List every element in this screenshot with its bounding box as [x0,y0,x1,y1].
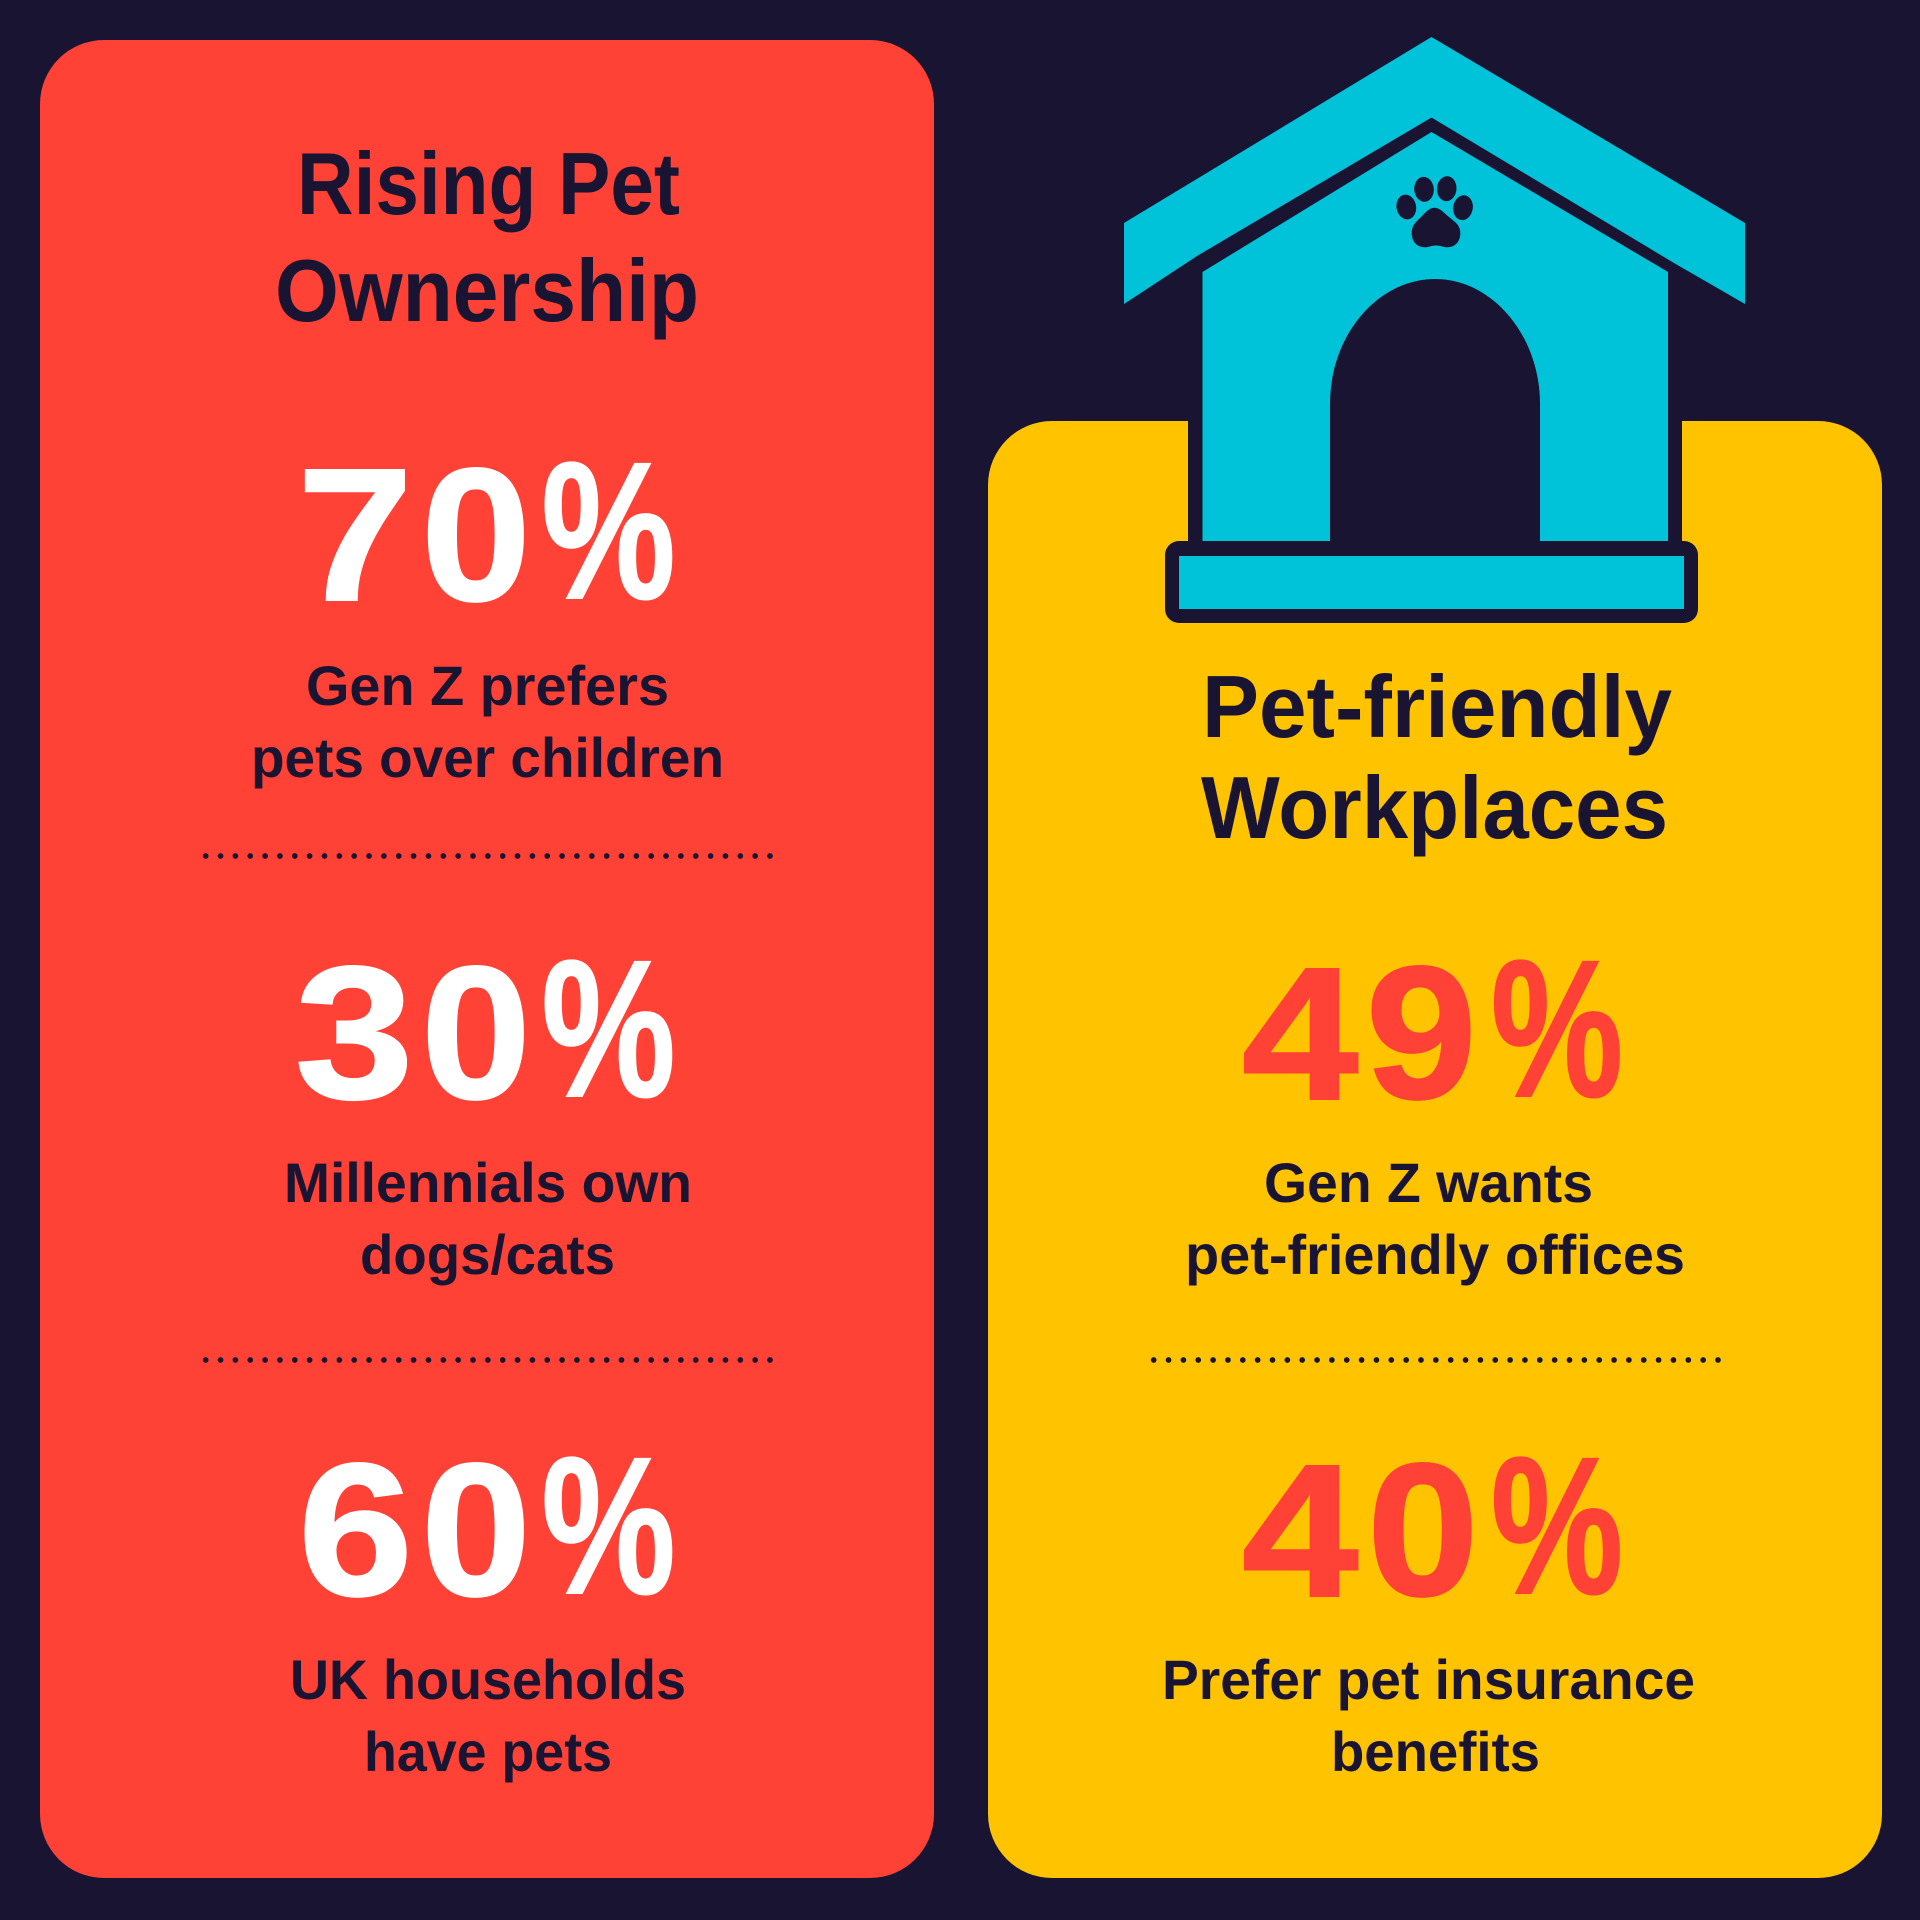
house body [1202,132,1668,541]
stat: 40% [1242,1417,1623,1637]
text: millennials own dogs/cats [284,1151,692,1286]
text: prefer pet insurance: Prefer pet insurance [1162,1648,1695,1711]
text: gen z prefers pets: Gen Z prefers [306,654,669,717]
text: prefer pet insurance: benefits [1331,1720,1540,1783]
house base [1179,556,1684,609]
text: prefer pet insurance [1162,1648,1695,1783]
heading: rising pet ownership: Rising Pet [297,134,680,233]
heading: pet-friendly workplaces: Workplaces [1201,758,1668,857]
stat: 40%: 4 [1242,1426,1358,1637]
stat: 49%: % [1491,920,1623,1138]
panel: pet-friendly workplaces [988,421,1882,1878]
stat: 60%: % [542,1417,676,1635]
text: uk households have pets: UK households [290,1648,686,1711]
text: uk households have pets [290,1648,686,1783]
stat: 49%: 9 [1366,928,1477,1139]
stat: 40%: 0 [1367,1425,1479,1636]
stat: 30%: 0 [421,928,531,1139]
stat: 49%: 4 [1242,929,1358,1140]
text: gen z prefers pets [251,654,724,789]
stat: 60% [298,1417,676,1636]
text: millennials own dogs/cats: Millennials own [284,1151,692,1214]
house roof [1124,37,1745,304]
stat: 70%: 7 [297,430,413,641]
heading: rising pet ownership [275,134,699,340]
text: uk households have pets: have pets [364,1720,612,1783]
text: gen z wants offices: pet-friendly offices [1185,1223,1685,1286]
stat: 30%: 3 [295,928,414,1139]
text: gen z wants offices [1185,1151,1685,1286]
heading: rising pet ownership: Ownership [275,241,699,340]
stat: 70% [297,422,676,641]
stat: 30% [295,920,676,1139]
icon: dog house [1124,37,1745,623]
text: millennials own dogs/cats: dogs/cats [360,1223,615,1286]
text: gen z prefers pets: pets over children [251,726,724,789]
stat: 60%: 0 [421,1425,531,1636]
text: gen z wants offices: Gen Z wants [1264,1151,1593,1214]
stat: 40%: % [1491,1417,1623,1635]
stat: 70%: 0 [421,430,531,641]
stat: 49% [1242,920,1623,1140]
stat: 30%: % [542,920,676,1138]
heading: pet-friendly workplaces: Pet-friendly [1202,657,1672,756]
panel: rising pet ownership [40,40,934,1878]
stat: 70%: % [542,422,676,640]
heading: pet-friendly workplaces [1201,657,1672,857]
stat: 60%: 6 [298,1425,413,1636]
icon: paw print [1394,175,1475,247]
